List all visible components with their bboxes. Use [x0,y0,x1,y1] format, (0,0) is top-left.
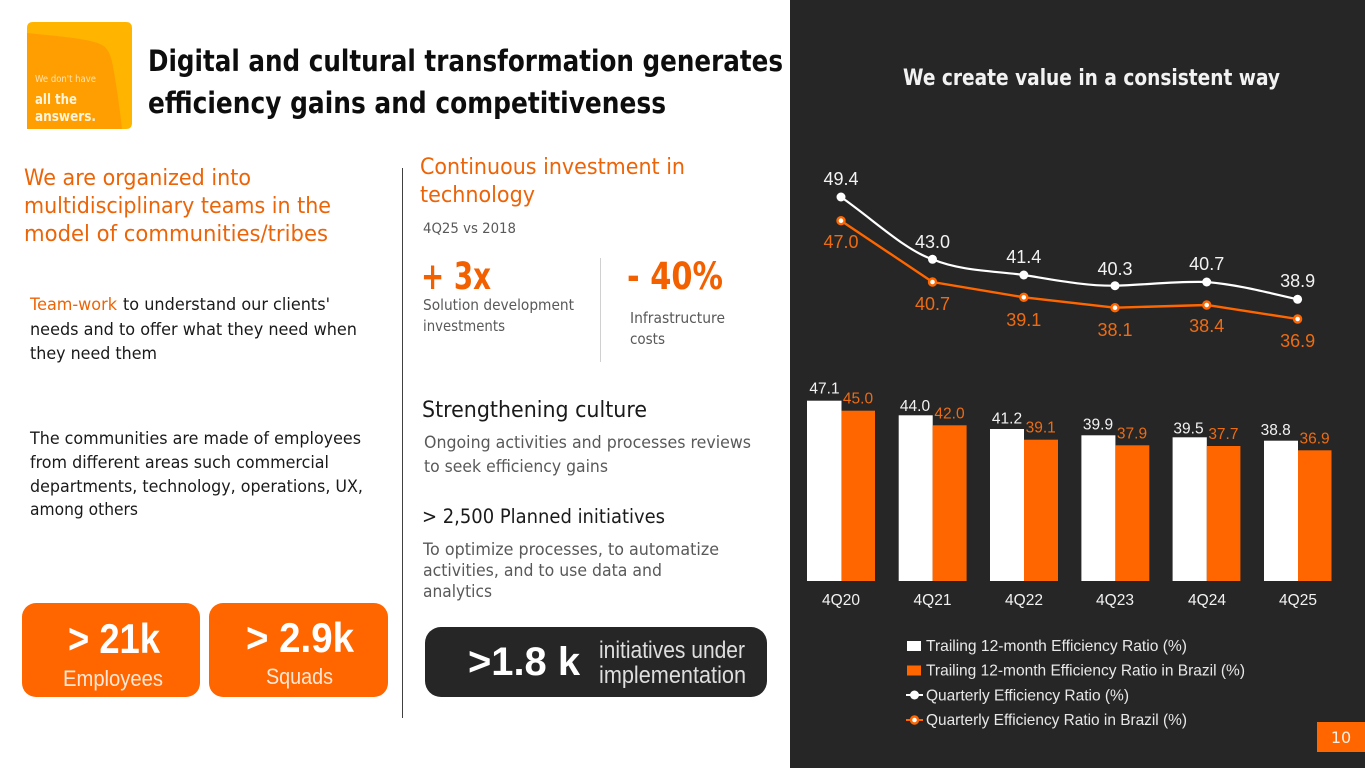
text block: communities: among others [30,500,138,520]
logo: we don't have all the answers: answers. [35,109,96,125]
metric: solution development: Solution development [423,296,574,314]
bar chart: trailing 12-month efficiency ratio: 38.8 [1261,422,1291,439]
page number: 10 [1331,728,1351,747]
text block: communities: from different areas such commercial [30,453,329,473]
line chart: quarterly efficiency ratio: 39.1 [1006,310,1041,330]
bar chart: trailing 12-month efficiency ratio: 4Q22 [1005,592,1043,609]
chart legend: Quarterly Efficiency Ratio in Brazil (%) [926,712,1187,729]
section: planned initiatives: activities, and to use data and [423,561,662,580]
text block: communities: The communities are made of employees [29,429,361,449]
text block: team-work: needs and to offer what they need when [30,320,357,340]
stat card: employees: Employees [63,666,163,691]
line chart: quarterly efficiency ratio: 49.4 [823,169,859,189]
heading: organized into teams: model of communities/tribes [24,222,328,247]
line chart: quarterly efficiency ratio: 40.3 [1097,259,1133,279]
bar chart: trailing 12-month efficiency ratio [807,380,1332,609]
section: planned initiatives: > 2,500 Planned initiatives [422,505,665,528]
metric: infrastructure costs: Infrastructure [630,309,725,327]
line chart: quarterly efficiency ratio: 40.7 [915,294,950,314]
stat card: squads: Squads [266,664,333,689]
bar chart: trailing 12-month efficiency ratio: 37.9 [1117,426,1147,442]
section: planned initiatives [422,505,719,601]
section: strengthening culture: to seek efficiency gains [424,457,608,477]
text block: team-work: to understand our clients' [123,295,330,315]
text block: communities [29,429,363,520]
chart legend: Quarterly Efficiency Ratio (%) [926,687,1129,704]
text block: team-work: they need them [30,344,157,364]
stat card: squads: > 2.9k [246,614,355,661]
logo: we don't have all the answers: all the [35,92,77,108]
callout: initiatives under implementation: initiatives under [599,637,745,664]
bar chart: trailing 12-month efficiency ratio: 39.5 [1173,420,1204,438]
line chart: quarterly efficiency ratio: 43.0 [915,232,950,252]
title: efficiency gains and competitiveness [148,86,666,120]
bar chart: trailing 12-month efficiency ratio: 4Q21 [914,592,951,609]
chart legend: Trailing 12-month Efficiency Ratio in Brazil (%) [926,663,1245,680]
text block: team-work: Team-work [29,295,117,315]
title: Digital and cultural transformation generates [148,44,783,78]
line chart: quarterly efficiency ratio: 38.4 [1189,316,1224,336]
section: planned initiatives: analytics [423,582,492,601]
bar chart: trailing 12-month efficiency ratio: 4Q24 [1188,592,1226,609]
logo: we don't have all the answers: We don't have [35,74,96,85]
heading: continuous investment: Continuous investment in [420,155,685,180]
callout: initiatives under implementation [425,627,767,697]
bar chart: trailing 12-month efficiency ratio: 47.1 [809,380,840,398]
bar chart: trailing 12-month efficiency ratio: 42.0 [934,406,965,422]
title [148,44,783,120]
metric: infrastructure costs [627,255,725,348]
right panel heading: We create value in a consistent way [903,66,1280,91]
bar chart: trailing 12-month efficiency ratio: 4Q25 [1279,592,1317,609]
bar chart: trailing 12-month efficiency ratio: 39.1 [1026,420,1056,436]
callout: initiatives under implementation: implementation [599,662,746,689]
section: strengthening culture: Ongoing activities and processes reviews [424,433,751,453]
stat card: squads [209,603,388,697]
line chart: quarterly efficiency ratio: 38.9 [1280,271,1315,291]
line chart: quarterly efficiency ratio [823,169,1315,351]
text block: communities: departments, technology, operations, UX, [30,477,363,497]
line chart: quarterly efficiency ratio: 41.4 [1006,247,1041,267]
bar chart: trailing 12-month efficiency ratio: 4Q23 [1096,592,1134,609]
stat card: employees [22,603,200,697]
heading: organized into teams: multidisciplinary teams in the [24,194,331,219]
logo: we don't have all the answers [27,22,132,129]
metric: infrastructure costs: - 40% [627,255,723,298]
text block: team-work [29,295,357,364]
bar chart: trailing 12-month efficiency ratio: 45.0 [843,390,873,408]
line chart: quarterly efficiency ratio: 47.0 [823,232,859,252]
line chart: quarterly efficiency ratio: 38.1 [1097,320,1133,340]
section: strengthening culture: Strengthening culture [422,398,647,423]
section: strengthening culture [422,398,751,477]
period label: 4Q25 vs 2018 [423,221,516,237]
metric: solution development [421,255,574,335]
bar chart: trailing 12-month efficiency ratio: 44.0 [900,398,930,415]
metric: solution development: investments [423,317,505,335]
callout: initiatives under implementation: >1.8 k [468,640,581,684]
line chart: quarterly efficiency ratio: 40.7 [1189,254,1224,274]
bar chart: trailing 12-month efficiency ratio: 37.7 [1208,426,1238,443]
heading: continuous investment: technology [420,183,535,208]
chart legend: Trailing 12-month Efficiency Ratio (%) [926,638,1187,655]
metric: solution development: + 3x [421,255,491,298]
chart legend [906,638,1245,729]
page number [1317,722,1365,752]
bar chart: trailing 12-month efficiency ratio: 39.9 [1083,416,1113,434]
line chart: quarterly efficiency ratio: 36.9 [1280,331,1315,351]
heading: organized into teams: We are organized into [24,166,251,191]
dark right panel [790,0,1365,768]
bar chart: trailing 12-month efficiency ratio: 36.9 [1300,430,1330,448]
bar chart: trailing 12-month efficiency ratio: 41.2 [992,410,1022,428]
section: planned initiatives: To optimize processes, to automatize [422,540,719,559]
bar chart: trailing 12-month efficiency ratio: 4Q20 [822,592,860,609]
stat card: employees: > 21k [68,615,161,662]
metric: infrastructure costs: costs [630,330,665,348]
heading: organized into teams [24,166,331,247]
heading: continuous investment [420,155,685,208]
